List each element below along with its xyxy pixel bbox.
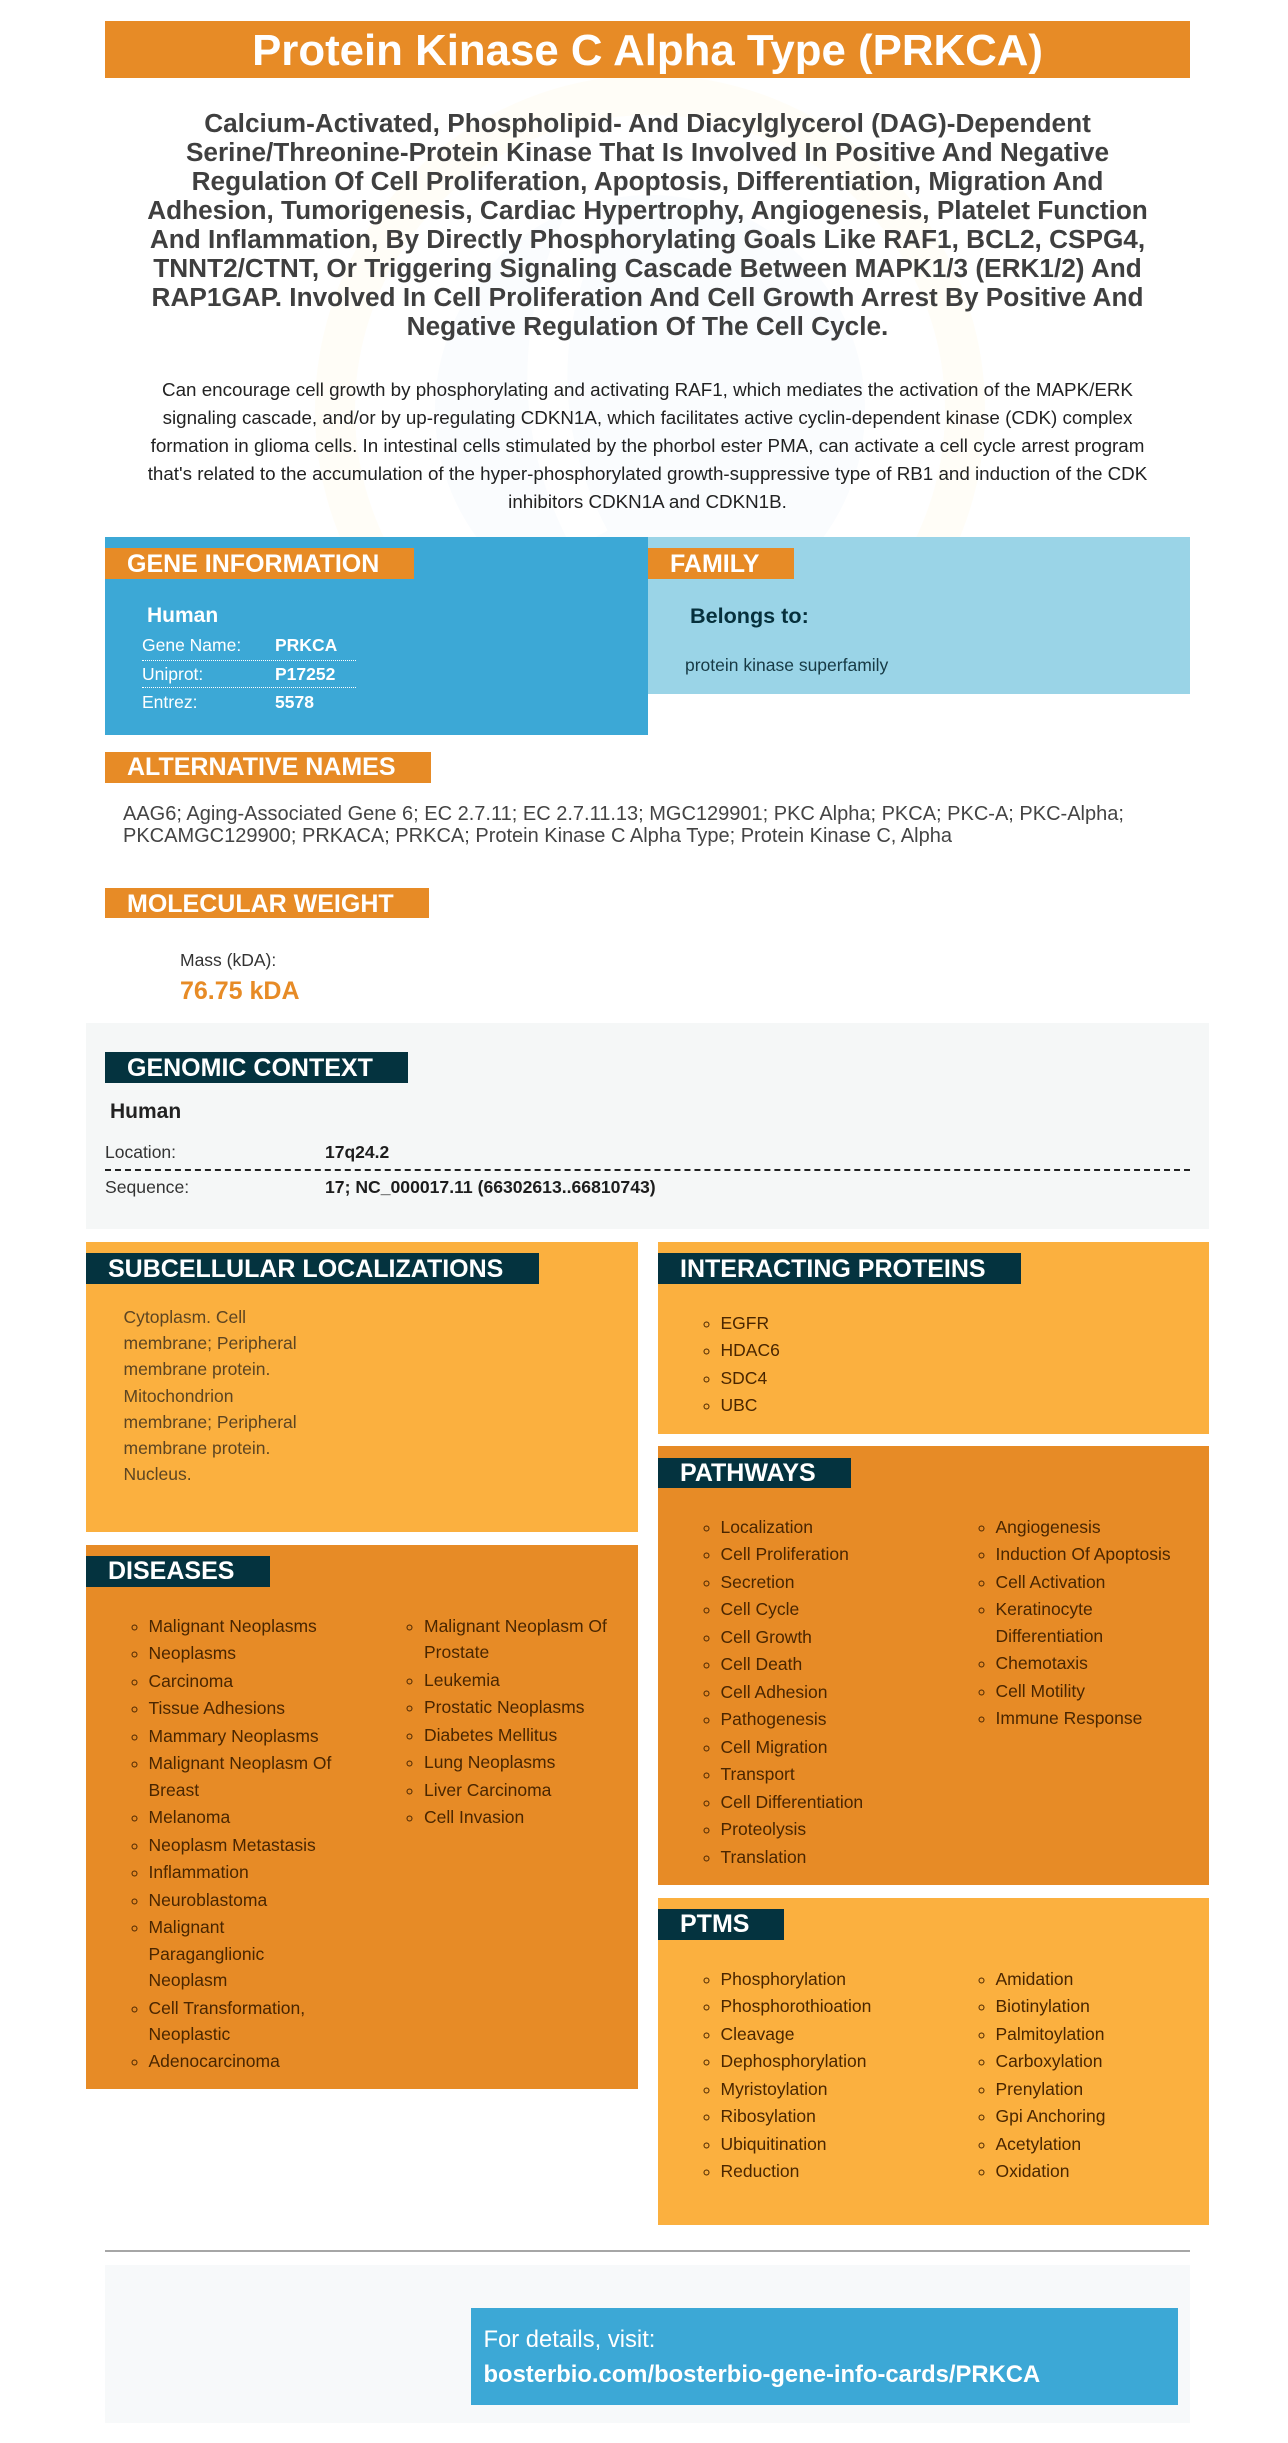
panel: PTMs bbox=[658, 1898, 1209, 2225]
subtitle: protein function summary: Negative Regulation Of The Cell Cycle. bbox=[407, 311, 888, 341]
description paragraph: signaling cascade, and/or by up-regulating CDKN1A, which facilitates active cyclin-dependent kinase (CDK) complex bbox=[163, 407, 1132, 428]
pathway list column 2: Angiogenesis bbox=[996, 1517, 1101, 1537]
protein list: SDC4 bbox=[720, 1368, 767, 1388]
pathway list column 2: Immune Response bbox=[996, 1708, 1142, 1728]
heading: alternative names: ALTERNATIVE NAMES bbox=[127, 753, 396, 781]
PTM list column 2: Gpi Anchoring bbox=[996, 2106, 1105, 2126]
location row: 17q24.2 bbox=[325, 1142, 389, 1162]
pathway list column 1: Cell Growth bbox=[720, 1627, 812, 1647]
localization text bbox=[124, 1307, 297, 1484]
heading: diseases: DISEASES bbox=[108, 1557, 234, 1585]
localization text: membrane; Peripheral bbox=[124, 1412, 297, 1432]
pathway list column 2 bbox=[978, 1517, 1171, 1728]
subtitle: protein function summary bbox=[147, 108, 1148, 341]
location row bbox=[105, 1140, 1190, 1171]
description paragraph bbox=[148, 379, 1147, 512]
localization text: membrane protein. bbox=[124, 1438, 270, 1458]
protein list: HDAC6 bbox=[720, 1340, 780, 1360]
disease list column 1: Neoplastic bbox=[148, 2024, 230, 2044]
disease list column 1: Malignant Neoplasms bbox=[148, 1616, 317, 1636]
sequence row: Sequence: bbox=[105, 1177, 189, 1197]
disease list column 1: Paraganglionic bbox=[148, 1944, 264, 1964]
PTM list column 2: Carboxylation bbox=[996, 2051, 1102, 2071]
disease list column 2: Prostatic Neoplasms bbox=[424, 1697, 584, 1717]
pathway list column 2: Induction Of Apoptosis bbox=[996, 1544, 1171, 1564]
localization text: Nucleus. bbox=[124, 1464, 192, 1484]
disease list column 2: Malignant Neoplasm Of bbox=[424, 1616, 607, 1636]
PTM list column 2 bbox=[978, 1969, 1105, 2181]
molecular weight value: Mass (kDA): bbox=[180, 950, 276, 970]
pathway list column 1: Cell Proliferation bbox=[720, 1544, 849, 1564]
description paragraph: that's related to the accumulation of the hyper-phosphorylated growth-suppressive type of RB1 and induction of the CDK bbox=[148, 463, 1147, 484]
heading: family: FAMILY bbox=[670, 550, 759, 578]
disease list column 2: Prostate bbox=[424, 1642, 489, 1662]
disease list column 2: Lung Neoplasms bbox=[424, 1752, 555, 1772]
panel: diseases bbox=[86, 1545, 638, 2089]
alternative names text: AAG6; Aging-Associated Gene 6; EC 2.7.11; EC 2.7.11.13; MGC129901; PKC Alpha; PKCA; PKC-A; PKC-Alpha; bbox=[123, 803, 1124, 825]
subtitle: protein function summary: Regulation Of Cell Proliferation, Apoptosis, Differentiation, Migration And bbox=[192, 166, 1103, 196]
uniprot row: Uniprot: bbox=[142, 664, 203, 684]
belongs to label: Belongs to: bbox=[690, 603, 809, 628]
disease list column 1: Tissue Adhesions bbox=[148, 1698, 285, 1718]
PTM list column 1: Cleavage bbox=[720, 2024, 794, 2044]
alternative names text: PKCAMGC129900; PRKACA; PRKCA; Protein Kinase C Alpha Type; Protein Kinase C, Alpha bbox=[123, 825, 952, 847]
callout: details link bbox=[471, 2308, 1178, 2405]
disease list column 2 bbox=[406, 1616, 607, 1827]
pathway list column 1: Cell Adhesion bbox=[720, 1682, 828, 1702]
disease list column 1: Carcinoma bbox=[148, 1671, 233, 1691]
gene name row: Gene Name: bbox=[142, 635, 241, 655]
gene name row: PRKCA bbox=[275, 635, 337, 655]
entrez row: Entrez: bbox=[142, 692, 197, 712]
PTM list column 2: Palmitoylation bbox=[996, 2024, 1104, 2044]
description paragraph: Can encourage cell growth by phosphorylating and activating RAF1, which mediates the activation of the MAPK/ERK bbox=[162, 379, 1133, 400]
panel: interacting proteins bbox=[658, 1242, 1209, 1434]
disease list column 1: Neuroblastoma bbox=[148, 1890, 267, 1910]
panel: genomic context bbox=[86, 1023, 1209, 1229]
entrez row bbox=[142, 692, 314, 712]
pathway list column 1: Cell Cycle bbox=[720, 1599, 799, 1619]
heading: gene information: GENE INFORMATION bbox=[127, 550, 379, 578]
heading: PTMs bbox=[658, 1909, 784, 1940]
molecular weight value: 76.75 kDA bbox=[180, 977, 300, 1005]
entrez row: 5578 bbox=[275, 692, 314, 712]
pathway list column 2: Keratinocyte bbox=[996, 1599, 1093, 1619]
molecular weight value bbox=[180, 950, 300, 1005]
PTM list column 1: Ubiquitination bbox=[720, 2134, 827, 2154]
alternative names text bbox=[123, 803, 1124, 847]
PTM list column 2: Oxidation bbox=[996, 2161, 1069, 2181]
panel: gene information bbox=[105, 537, 648, 735]
species label: Human bbox=[147, 604, 218, 627]
pathway list column 2: Cell Activation bbox=[996, 1572, 1105, 1592]
sequence row: 17; NC_000017.11 (66302613..66810743) bbox=[325, 1177, 656, 1197]
disease list column 1: Melanoma bbox=[148, 1807, 230, 1827]
heading: genomic context: GENOMIC CONTEXT bbox=[127, 1054, 373, 1082]
heading: pathways bbox=[658, 1458, 851, 1488]
pathway list column 1: Cell Death bbox=[720, 1654, 802, 1674]
disease list column 1: Malignant bbox=[148, 1917, 224, 1937]
disease list column 2: Leukemia bbox=[424, 1670, 500, 1690]
protein list bbox=[704, 1312, 780, 1415]
visit label: For details, visit: bbox=[484, 2326, 655, 2353]
disease list column 1: Neoplasms bbox=[148, 1643, 236, 1663]
subtitle: protein function summary: And Inflammation, By Directly Phosphorylating Goals Like RAF1, BCL2, CSPG4, bbox=[150, 224, 1145, 254]
PTM list column 1: Ribosylation bbox=[720, 2106, 816, 2126]
panel: subcellular localizations bbox=[86, 1242, 638, 1532]
pathway list column 1: Pathogenesis bbox=[720, 1709, 827, 1729]
protein list: UBC bbox=[720, 1395, 757, 1415]
species label: Human bbox=[110, 1100, 181, 1123]
disease list column 2: Diabetes Mellitus bbox=[424, 1725, 557, 1745]
disease list column 1: Neoplasm bbox=[148, 1970, 227, 1990]
sequence row bbox=[105, 1177, 656, 1197]
PTM list column 2: Biotinylation bbox=[996, 1996, 1090, 2016]
uniprot row: P17252 bbox=[275, 664, 335, 684]
disease list column 1: Mammary Neoplasms bbox=[148, 1726, 319, 1746]
gene name row bbox=[142, 634, 356, 661]
description paragraph: inhibitors CDKN1A and CDKN1B. bbox=[508, 491, 787, 512]
PTM list column 1 bbox=[704, 1969, 871, 2181]
PTM list column 1: Phosphorothioation bbox=[720, 1996, 871, 2016]
URL: bosterbio.com/bosterbio-gene-info-cards/PRKCA bbox=[484, 2361, 1040, 2388]
subtitle: protein function summary: RAP1GAP. Involved In Cell Proliferation And Cell Growth Arrest By Positive And bbox=[152, 282, 1143, 312]
localization text: Mitochondrion bbox=[124, 1386, 233, 1406]
panel: family bbox=[648, 537, 1190, 694]
localization text: membrane protein. bbox=[124, 1359, 270, 1379]
pathway list column 2: Cell Motility bbox=[996, 1681, 1085, 1701]
pathway list column 1 bbox=[704, 1517, 863, 1867]
title: Protein Kinase C Alpha Type (PRKCA) bbox=[252, 26, 1043, 75]
uniprot row bbox=[142, 661, 356, 688]
subtitle: protein function summary: Adhesion, Tumorigenesis, Cardiac Hypertrophy, Angiogenesis, Platelet Function bbox=[147, 195, 1148, 225]
localization text: membrane; Peripheral bbox=[124, 1333, 297, 1353]
disease list column 1 bbox=[132, 1616, 332, 2071]
disease list column 2: Cell Invasion bbox=[424, 1807, 524, 1827]
pathway list column 1: Cell Differentiation bbox=[720, 1792, 863, 1812]
PTM list column 2: Acetylation bbox=[996, 2134, 1081, 2154]
disease list column 1: Adenocarcinoma bbox=[148, 2051, 280, 2071]
heading: diseases bbox=[86, 1556, 270, 1587]
PTM list column 1: Myristoylation bbox=[720, 2079, 827, 2099]
pathway list column 1: Cell Migration bbox=[720, 1737, 827, 1757]
panel: pathways bbox=[658, 1446, 1209, 1885]
pathway list column 2: Differentiation bbox=[996, 1626, 1103, 1646]
PTM list column 1: Reduction bbox=[720, 2161, 799, 2181]
heading: PTMs: PTMS bbox=[680, 1910, 749, 1938]
disease list column 1: Neoplasm Metastasis bbox=[148, 1835, 316, 1855]
subtitle: protein function summary: Calcium-Activated, Phospholipid- And Diacylglycerol (DAG)-Dependent bbox=[204, 108, 1091, 138]
disease list column 1: Breast bbox=[148, 1780, 199, 1800]
pathway list column 1: Transport bbox=[720, 1764, 795, 1784]
localization text: Cytoplasm. Cell bbox=[124, 1307, 246, 1327]
heading: pathways: PATHWAYS bbox=[680, 1459, 816, 1487]
subtitle: protein function summary: TNNT2/CTNT, Or Triggering Signaling Cascade Between MAPK1/3 (ERK1/2) And bbox=[153, 253, 1142, 283]
title bbox=[105, 21, 1190, 78]
pathway list column 1: Proteolysis bbox=[720, 1819, 806, 1839]
pathway list column 2: Chemotaxis bbox=[996, 1653, 1088, 1673]
description paragraph: formation in glioma cells. In intestinal cells stimulated by the phorbol ester PMA, can activate a cell cycle arrest program bbox=[151, 435, 1144, 456]
disease list column 2: Liver Carcinoma bbox=[424, 1780, 551, 1800]
location row: Location: bbox=[105, 1142, 176, 1162]
heading: family bbox=[648, 548, 794, 579]
panel: footer bbox=[105, 2265, 1190, 2423]
disease list column 1: Inflammation bbox=[148, 1862, 249, 1882]
pathway list column 1: Secretion bbox=[720, 1572, 794, 1592]
PTM list column 1: Phosphorylation bbox=[720, 1969, 846, 1989]
PTM list column 1: Dephosphorylation bbox=[720, 2051, 866, 2071]
heading: interacting proteins: INTERACTING PROTEINS bbox=[680, 1255, 986, 1283]
PTM list column 2: Prenylation bbox=[996, 2079, 1083, 2099]
heading: subcellular localizations: SUBCELLULAR LOCALIZATIONS bbox=[108, 1255, 503, 1283]
protein list: EGFR bbox=[720, 1312, 769, 1332]
disease list column 1: Cell Transformation, bbox=[148, 1998, 305, 2018]
PTM list column 2: Amidation bbox=[996, 1969, 1073, 1989]
heading: molecular weight: MOLECULAR WEIGHT bbox=[127, 890, 394, 918]
pathway list column 1: Translation bbox=[720, 1847, 806, 1867]
family value: protein kinase superfamily bbox=[685, 655, 888, 675]
background watermark logo bbox=[300, 70, 1000, 550]
pathway list column 1: Localization bbox=[720, 1517, 813, 1537]
subtitle: protein function summary: Serine/Threonine-Protein Kinase That Is Involved In Positive And Negative bbox=[186, 137, 1109, 167]
disease list column 1: Malignant Neoplasm Of bbox=[148, 1753, 331, 1773]
